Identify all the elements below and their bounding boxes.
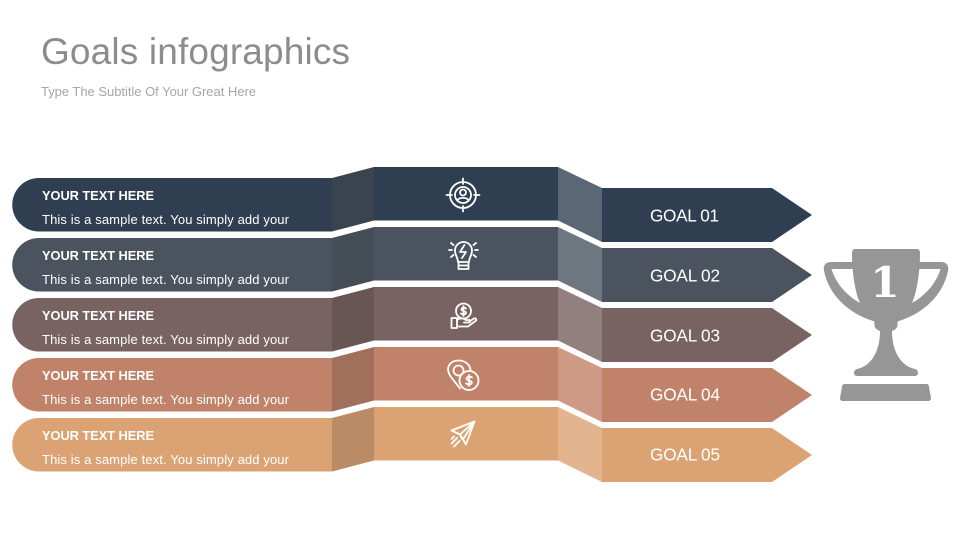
left banner 4 [12, 358, 332, 412]
body text 3: This is a sample text. You simply add your [42, 332, 290, 347]
icon: target with person [446, 178, 480, 212]
icon: hand holding coin [452, 304, 476, 328]
goal label 4: GOAL 04 [650, 384, 720, 404]
heading 1: YOUR TEXT HERE [42, 188, 154, 203]
right fold 4 [558, 347, 602, 422]
body text 4: This is a sample text. You simply add your [42, 392, 290, 407]
left fold 2 [332, 227, 374, 292]
middle band 3 [374, 287, 558, 340]
middle band 4 [374, 347, 558, 400]
trophy handle openings [832, 269, 940, 305]
goal row 3 [12, 287, 812, 362]
goal row 2 [12, 227, 812, 302]
heading 5: YOUR TEXT HERE [42, 428, 154, 443]
left fold 5 [332, 407, 374, 472]
goal label 5: GOAL 05 [650, 444, 720, 464]
middle band 2 [374, 227, 558, 280]
middle band 1 [374, 167, 558, 220]
left fold 4 [332, 347, 374, 412]
right fold 1 [558, 167, 602, 242]
goal arrow 3 [602, 308, 812, 362]
goal arrow 5 [602, 428, 812, 482]
icon: paper plane [452, 422, 474, 446]
icon: trophy [824, 249, 948, 401]
goal label 2: GOAL 02 [650, 266, 720, 286]
right fold 3 [558, 287, 602, 362]
body text 1: This is a sample text. You simply add your [42, 212, 290, 227]
body text 2: This is a sample text. You simply add your [42, 272, 290, 287]
icon: map pin with coin [448, 360, 478, 390]
middle band 5 [374, 407, 558, 460]
heading 2: YOUR TEXT HERE [42, 248, 154, 263]
trophy cup and stem [852, 249, 920, 376]
goal arrow 1 [602, 188, 812, 242]
goal row 5 [12, 407, 812, 482]
title: Goals infographics [41, 31, 350, 72]
goal label 3: GOAL 03 [650, 326, 720, 346]
right fold 2 [558, 227, 602, 302]
heading 4: YOUR TEXT HERE [42, 368, 154, 383]
heading 3: YOUR TEXT HERE [42, 308, 154, 323]
goal label 1: GOAL 01 [650, 206, 719, 226]
left banner 2 [12, 238, 332, 292]
body text 5: This is a sample text. You simply add your [42, 452, 290, 467]
goal arrow 4 [602, 368, 812, 422]
goal row 1 [12, 167, 812, 242]
trophy handles [824, 262, 948, 321]
right fold 5 [558, 407, 602, 482]
left banner 1 [12, 178, 332, 232]
left banner 3 [12, 298, 332, 352]
trophy base [840, 384, 931, 401]
left fold 3 [332, 287, 374, 352]
goal row 4 [12, 347, 812, 422]
left banner 5 [12, 418, 332, 472]
goal arrow 2 [602, 248, 812, 302]
left fold 1 [332, 167, 374, 232]
subtitle: Type The Subtitle Of Your Great Here [41, 84, 256, 99]
icon: light bulb [449, 242, 478, 269]
trophy number: 1 [870, 258, 900, 307]
